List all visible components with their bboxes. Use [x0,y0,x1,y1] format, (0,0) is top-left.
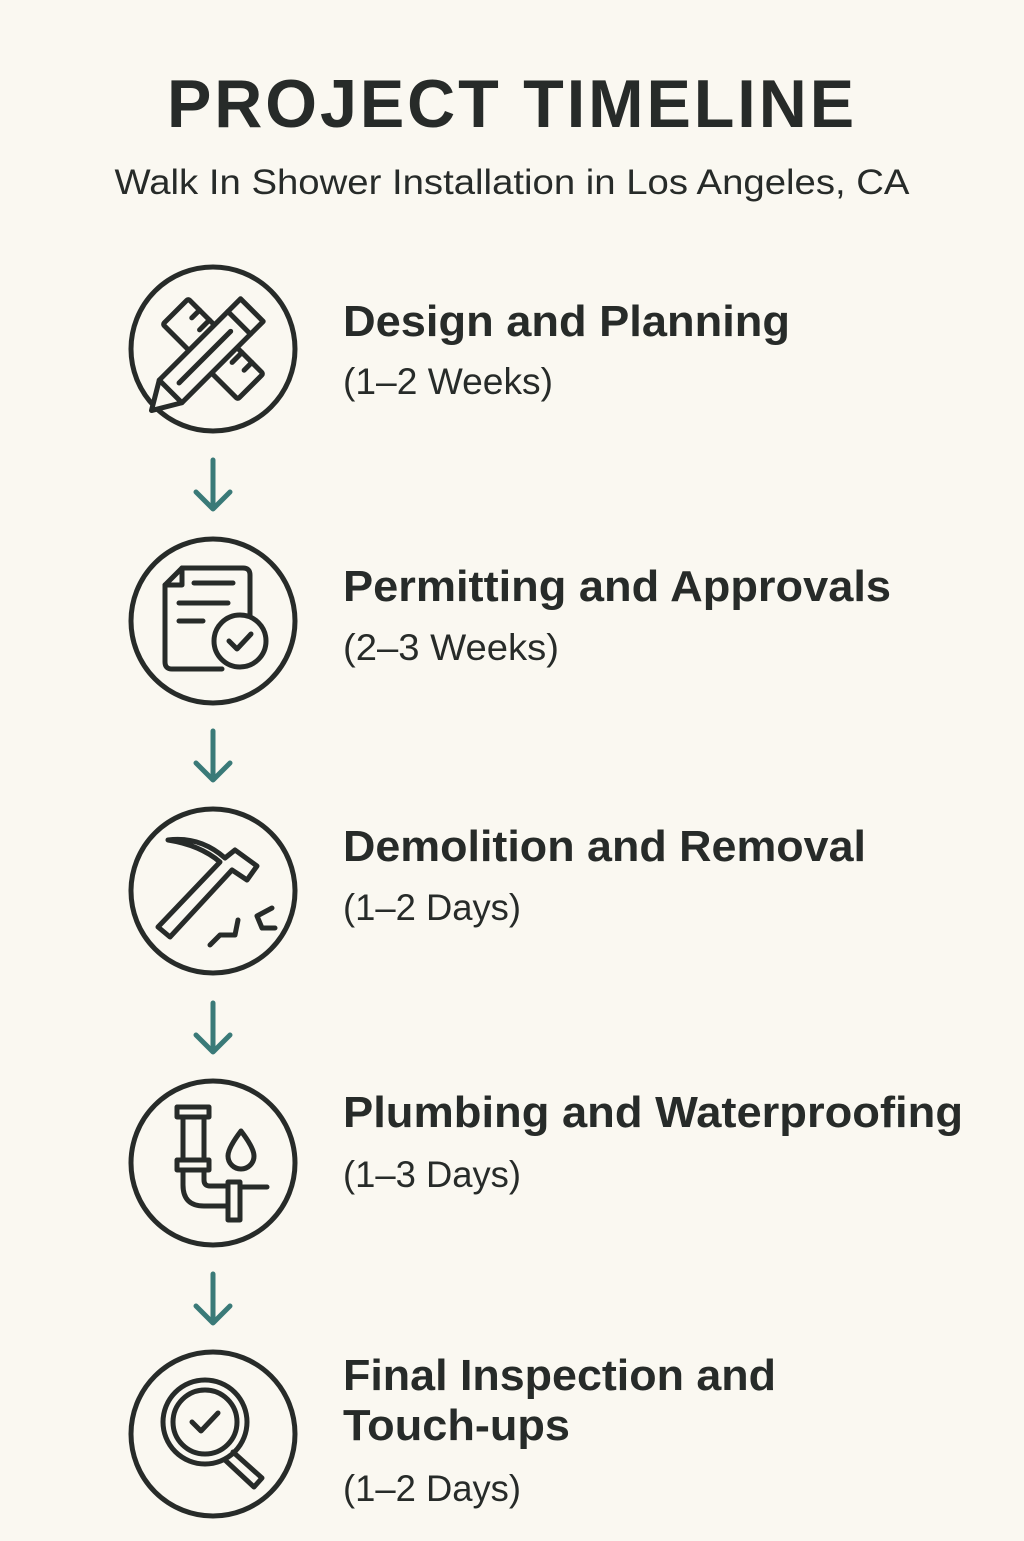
step 5: final inspection: Touch-ups [343,1401,570,1450]
arrow [196,460,230,509]
icon: magnifier with check [131,1352,295,1516]
step 2: permitting [131,539,891,703]
icon: ruler and pencil [131,267,295,431]
heading: Plumbing and Waterproofing [343,1088,963,1137]
duration: (1–3 Days) [343,1154,521,1195]
arrow [196,731,230,780]
arrow [196,1003,230,1052]
heading: Demolition and Removal [343,822,866,871]
heading: Permitting and Approvals [343,562,891,611]
duration: (2–3 Weeks) [343,627,559,668]
heading: Final Inspection and [343,1351,776,1400]
step 3: demolition [131,809,866,973]
heading: Design and Planning [343,297,790,346]
icon: hammer [131,809,295,973]
duration: (1–2 Weeks) [343,361,553,402]
duration: (1–2 Days) [343,887,521,928]
icon: pipe and drop [131,1081,295,1245]
subtitle: Walk In Shower Installation in Los Angeles, CA [114,163,910,202]
arrow [196,1274,230,1323]
title: PROJECT TIMELINE [167,66,857,142]
step 1: design and planning [131,267,790,431]
icon: document with check [131,539,295,703]
duration: (1–2 Days) [343,1468,521,1509]
step 5: final inspection [131,1351,776,1516]
step 4: plumbing [131,1081,963,1245]
